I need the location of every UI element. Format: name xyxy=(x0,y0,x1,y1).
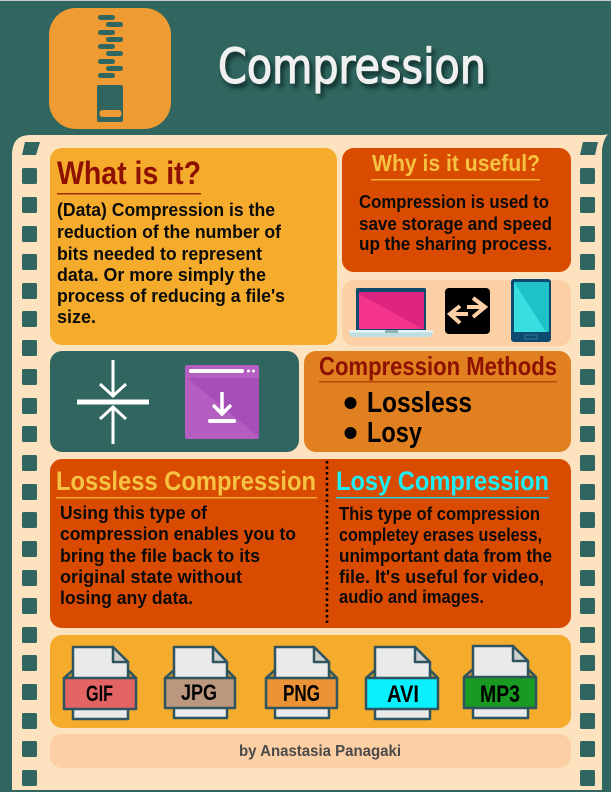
panel: compression methods xyxy=(304,351,571,452)
icon: zip file xyxy=(49,8,171,129)
method list xyxy=(344,387,472,449)
lossless text xyxy=(60,502,296,608)
icon: laptop xyxy=(349,288,433,337)
icon: exchange arrows xyxy=(445,288,490,334)
panel: compression visuals xyxy=(50,351,299,452)
losy text xyxy=(339,503,552,607)
heading: compression methods: Compression Methods xyxy=(319,351,557,381)
losy text: This type of compression xyxy=(339,503,540,524)
method list: Losy xyxy=(367,417,422,449)
icon: download window xyxy=(185,365,259,439)
lossless text: bring the file back to its xyxy=(60,545,260,566)
panel: what is it xyxy=(50,148,337,345)
definition text: reduction of the number of xyxy=(57,221,282,242)
icon: PNG file xyxy=(266,647,337,718)
panel: file formats xyxy=(50,635,571,728)
panel: lossless vs losy xyxy=(50,459,571,628)
definition text: (Data) Compression is the xyxy=(57,199,275,220)
losy text: completey erases useless, xyxy=(339,524,542,545)
icon: JPG file: JPG xyxy=(181,680,217,705)
losy text: file. It's useful for video, xyxy=(339,566,544,587)
credit text: by Anastasia Panagaki xyxy=(239,743,401,760)
definition text: size. xyxy=(57,306,96,327)
icon: AVI file: AVI xyxy=(387,681,419,708)
definition text: process of reducing a file's xyxy=(57,285,285,306)
usefulness text xyxy=(359,191,552,254)
lossless text: losing any data. xyxy=(60,587,193,608)
definition text: bits needed to represent xyxy=(57,243,262,264)
icon: tablet xyxy=(511,279,551,342)
definition text xyxy=(57,199,285,327)
heading: what is it: What is it? xyxy=(57,155,201,191)
icon: MP3 file: MP3 xyxy=(480,681,520,708)
icon: compress arrows xyxy=(77,360,149,444)
usefulness text: save storage and speed xyxy=(359,213,552,234)
lossless text: Using this type of xyxy=(60,502,208,523)
usefulness text: up the sharing process. xyxy=(359,233,552,254)
panel: why is it useful xyxy=(342,148,571,272)
icon: PNG file: PNG xyxy=(283,680,320,706)
icon: AVI file xyxy=(366,647,438,719)
lossless text: original state without xyxy=(60,566,242,587)
heading: why is it useful: Why is it useful? xyxy=(372,150,540,176)
panel: credit xyxy=(50,734,571,768)
definition text: data. Or more simply the xyxy=(57,264,266,285)
lossless text: compression enables you to xyxy=(60,523,296,544)
method list: Lossless xyxy=(367,387,472,419)
usefulness text: Compression is used to xyxy=(359,191,549,212)
icon: GIF file: GIF xyxy=(86,681,113,706)
losy text: unimportant data from the xyxy=(339,545,552,566)
panel: devices xyxy=(342,279,571,346)
title: Compression xyxy=(218,39,486,95)
heading: losy compression: Losy Compression xyxy=(336,466,549,496)
icon: JPG file xyxy=(165,647,235,718)
icon: GIF file xyxy=(64,647,136,719)
icon: MP3 file xyxy=(464,646,536,718)
losy text: audio and images. xyxy=(339,586,484,607)
heading: lossless compression: Lossless Compression xyxy=(56,466,316,496)
